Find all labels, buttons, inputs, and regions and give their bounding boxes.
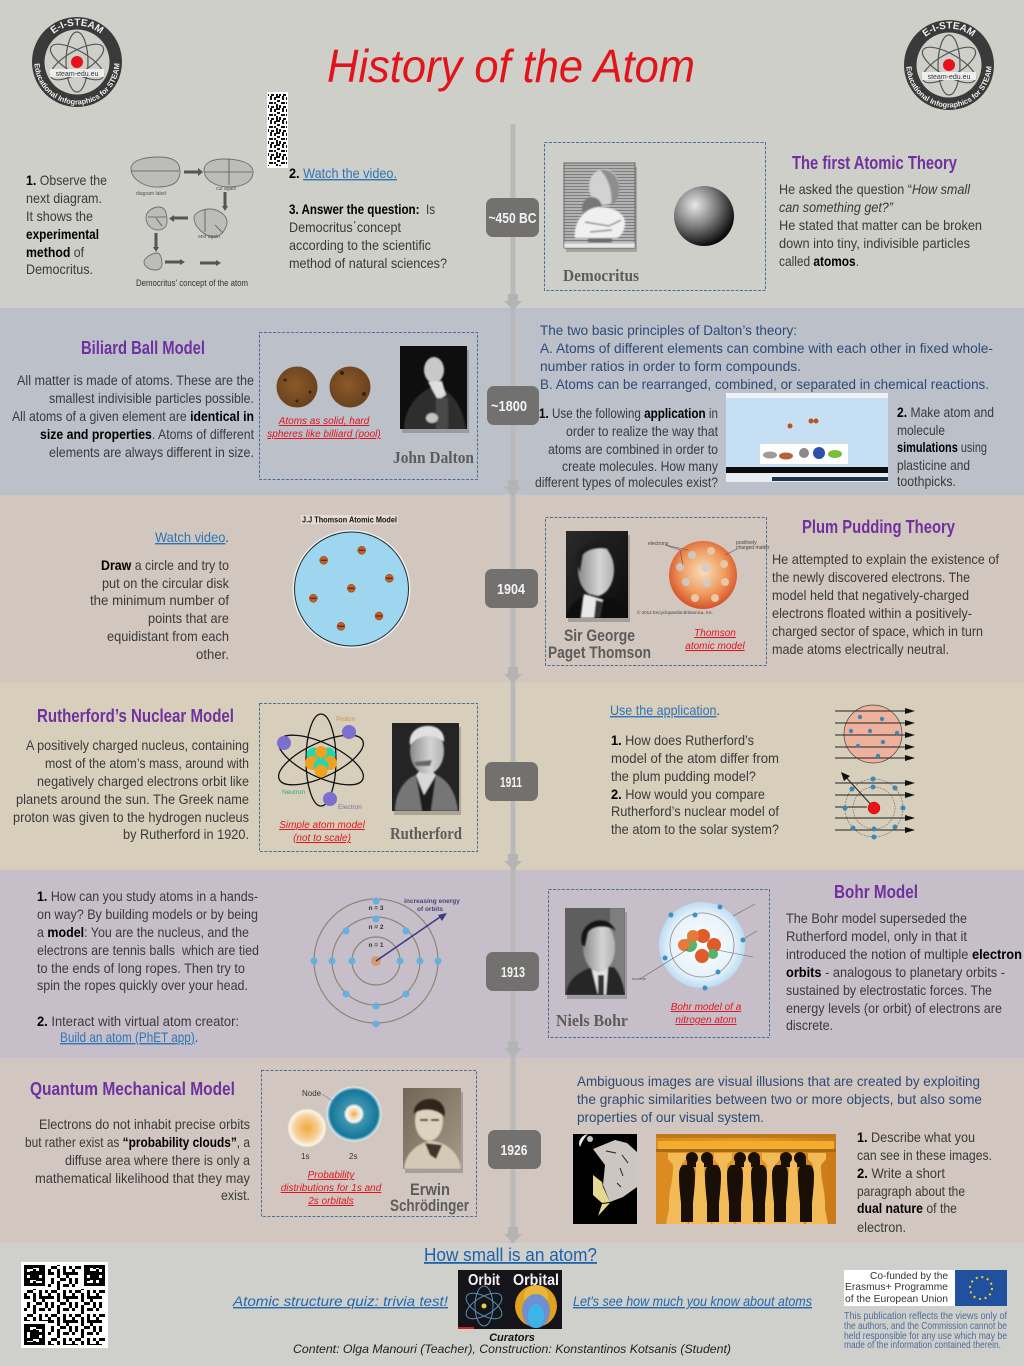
image: orbit vs orbital video thumbnail: Orbital [513,1272,559,1289]
text: Bohr model: energy levels (or orbit) of electrons are [786,1000,1002,1016]
caption: probability distributions: distributions for 1s and [281,1183,382,1194]
text: draw a circle task: points that are [148,610,229,626]
text: use the application: order to realize the way that [566,423,718,439]
heading: Plum Pudding Theory: Plum Pudding Theory [802,517,955,537]
diagram: Democritus' concept of the atom: diagram label [136,191,166,197]
text: first atomic theory: down into tiny, indivisible particles [779,235,970,251]
diagram: Democritus' concept of the atom [131,157,253,289]
diagram: simple atom model [272,714,370,811]
text: nuclear model: A positively charged nucleus, containing [26,737,249,753]
caption: Thomson atomic model: Thomson [694,628,736,639]
heading: Biliard Ball Model: Biliard Ball Model [81,338,205,358]
diagram: electron shells: n = 2 [368,924,384,931]
text: Bohr model: sustained by electrostatic forces. The [786,982,992,998]
text: describe the images: 1. Describe what you [857,1129,975,1145]
credits: curators: Content: Olga Manouri (Teacher), Construction: Konstantinos Kotsanis (Student) [293,1342,731,1356]
caption: atoms as solid spheres: spheres like billiard (pool) [267,429,381,440]
text: draw a circle task: Watch video. [155,529,229,545]
heading: Quantum Mechanical Model: Quantum Mechanical Model [30,1079,235,1099]
text: ambiguous images: the graphic similarities between two or more objects, but also some [577,1091,982,1107]
name: Rutherford: Rutherford [390,824,462,843]
diagram: plum pudding atom: positively [736,540,757,546]
text: nuclear model: proton was given to the hydrogen nucleus [13,809,249,825]
text: use the application questions: 1. How does Rutherford’s [611,732,754,748]
text: watch the video and answer [289,165,447,271]
text: use the application questions: model of the atom differ from [611,750,779,766]
heading: The first Atomic Theory: The first Atomic Theory [792,153,957,173]
text: draw a circle task: Draw a circle and try to [101,557,229,573]
dashed box: Democritus portrait and sphere [544,142,766,290]
text: watch the video and answer: 3. Answer the question: Is [289,201,435,217]
logo: E-I-STEAM right: steam-edu.eu [928,74,971,81]
text: nuclear model: by Rutherford in 1920. [123,826,249,842]
text: make atom simulations: simulations using [897,439,987,455]
diagram: simple atom model: Neutron [282,789,306,796]
logo: E-I-STEAM right: Educational Infographics for STEAM [906,66,992,109]
portrait: Rutherford [392,723,461,815]
diagram: electron shells: increasing energy [404,898,460,905]
text: ambiguous images: Ambiguous images are visual illusions that are created by exploiting [577,1073,980,1089]
text: nuclear model: planets around the sun. The Greek name [16,791,249,807]
text: principles of Dalton's theory: A. Atoms of different elements can combine with each other in fixed whole- [540,340,993,356]
text: study atoms in a hands-on way: Build an atom (PhET app). [60,1029,198,1045]
caption: simple atom model [279,820,366,844]
text: use the application questions: the plum pudding model? [611,768,756,784]
QR code: footer [21,1262,108,1348]
name: Niels Bohr: Niels Bohr [556,1011,628,1030]
text: use the application questions [610,702,779,837]
badge: 1926 [488,1130,541,1169]
name: Democritus: Democritus [563,266,639,285]
text: study atoms in a hands-on way: 2. Interact with virtual atom creator: [37,1013,239,1029]
panel: Thomson 1904 [0,495,1024,683]
portrait: Sir George Paget Thomson [566,531,630,622]
text: principles of Dalton's theory: B. Atoms can be rearranged, combined, or separated in chemical reactions. [540,376,989,392]
badge: 1904: 1904 [497,581,526,598]
diagram: Bohr nitrogen atom [632,902,757,990]
diagram: alpha scattering plum pudding [835,705,915,763]
text: use the application questions: Rutherford’s nuclear model of [611,803,779,819]
logo: E-I-STEAM left [32,17,122,107]
name: John Dalton: John Dalton [393,448,474,467]
text: describe the images [857,1129,992,1235]
timeline: vertical line with arrows [504,124,522,1243]
caption: Bohr model of a nitrogen atom: nitrogen atom [675,1015,737,1026]
text: first atomic theory: He asked the question “How small [779,181,971,197]
logo: E-I-STEAM right: E-I-STEAM [922,22,976,37]
portrait: Niels Bohr [565,908,627,999]
text: watch the video and answer: Democritus΄concept [289,219,401,235]
caption: probability distributions: 2s orbitals [307,1196,354,1207]
text: quantum model: exist. [221,1187,250,1203]
text: disclaimer [844,1311,1007,1351]
diagram: 1s and 2s orbitals: 1s [301,1152,309,1161]
text: principles of Dalton's theory [540,322,993,392]
panel: Bohr 1913 [0,870,1024,1058]
badge: 1913: 1913 [501,964,525,981]
caption: Bohr model of a nitrogen atom: Bohr model of a [671,1002,742,1013]
text: plum pudding theory: made atoms electrically neutral. [772,641,949,657]
diagram: Democritus' concept of the atom: cut again [216,186,237,192]
diagram: 1s and 2s orbitals: Node [302,1089,322,1098]
text: make atom simulations: plasticine and [897,457,970,473]
credits: curators: Curators [489,1332,535,1344]
text: study atoms in a hands-on way [37,888,259,1045]
header [32,17,994,110]
text: draw a circle task: equidistant from each [107,628,229,644]
text: make atom simulations: toothpicks. [897,473,956,489]
text: principles of Dalton's theory: The two basic principles of Dalton’s theory: [540,322,797,338]
image: ambiguous columns and people [656,1134,836,1224]
logo: E-I-STEAM left: steam-edu.eu [56,71,99,78]
text: draw a circle task: put on the circular disk [102,575,230,591]
diagram: simple atom model: Electron [338,804,362,811]
portrait: Democritus bust [564,163,637,252]
text: observe the diagram: 1. Observe the [26,172,107,188]
name: Erwin Schrödinger: Schrödinger [390,1196,469,1215]
icon: solid sphere [674,186,734,246]
text: observe the diagram: method of [26,244,84,260]
logo: Erasmus+ co-funded [844,1270,1007,1306]
caption: Thomson atomic model: atomic model [685,641,746,652]
name: Sir George Paget Thomson: Sir George [564,626,635,645]
panel: Democritus 450 BC [26,92,982,291]
text: make atom simulations: molecule [897,422,945,438]
text: study atoms in a hands-on way: to the ends of long ropes. Then try to [37,960,245,976]
text: describe the images: dual nature of the [857,1200,957,1216]
caption: Thomson atomic model [685,628,746,652]
logo: Erasmus+ co-funded: Co-funded by the [870,1271,948,1282]
text: use the application questions: 2. How would you compare [611,786,765,802]
text: billiard ball model: size and properties. Atoms of different [40,426,254,442]
text: plum pudding theory: electrons floated within a positively- [772,605,972,621]
badge: ~450 BC [486,198,539,237]
heading: Rutherford's Nuclear Model: Rutherford’s Nuclear Model [37,706,234,726]
badge: ~1800: ~1800 [491,398,527,415]
text: Bohr model [786,910,1022,1033]
caption: simple atom model: Simple atom model [279,820,366,831]
panel: Rutherford 1911 [0,683,1024,870]
title: History of the Atom [327,40,695,92]
text: use the application [535,405,718,490]
text: billiard ball model: All matter is made of atoms. These are the [17,372,254,388]
badge: 1904 [485,569,538,608]
diagram: Bohr nitrogen atom: nucleus [632,976,646,981]
text: quantum model [25,1116,250,1203]
text: watch the video and answer: 2. Watch the video. [289,165,397,181]
text: Bohr model: The Bohr model superseded the [786,910,967,926]
badge: 1911 [485,762,538,801]
text: billiard ball model [12,372,254,460]
text: nuclear model: negatively charged electrons orbit like [37,773,249,789]
image: orbit vs orbital video thumbnail: Orbit [468,1272,501,1289]
text: plum pudding theory: He attempted to explain the existence of [772,551,999,567]
text: study atoms in a hands-on way: on way? By building models or by being [37,906,258,922]
link: atomic structure quiz: Atomic structure quiz: trivia test! [232,1293,448,1309]
image: ambiguous face silhouette [573,1134,637,1224]
text: plum pudding theory: charged sector of space, which in turn [772,623,983,639]
text: quantum model: but rather exist as “probability clouds”, a [25,1134,250,1150]
text: study atoms in a hands-on way: 1. How can you study atoms in a hands- [37,888,258,904]
text: use the application: different types of molecules exist? [535,474,718,490]
text: make atom simulations [897,404,994,489]
text: observe the diagram: experimental [26,226,99,242]
dashed box: Dalton portrait and billiard balls [260,332,478,480]
text: describe the images: paragraph about the [857,1183,965,1199]
diagram: plum pudding atom [637,540,770,615]
QR code: video [267,92,288,168]
badge: ~1800 [487,386,539,425]
text: watch the video and answer: method of natural sciences? [289,255,447,271]
text: describe the images: can see in these images. [857,1147,992,1163]
text: study atoms in a hands-on way: spin the ropes quickly over your head. [37,977,248,993]
badge: 1911: 1911 [500,774,522,791]
logo: E-I-STEAM left: E-I-STEAM [50,18,104,34]
logo: E-I-STEAM left: Educational Infographics for STEAM [34,63,120,106]
text: use the application questions: the atom to the solar system? [611,821,779,837]
logo: Erasmus+ co-funded: of the European Union [845,1294,948,1305]
text: plum pudding theory: model held that negatively-charged [772,587,969,603]
text: study atoms in a hands-on way: electrons are tennis balls which are tied [37,942,259,958]
text: Bohr model: introduced the notion of multiple electron [786,946,1022,962]
text: plum pudding theory [772,551,999,657]
text: billiard ball model: smallest indivisible particles possible. [49,390,254,406]
text: observe the diagram: next diagram. [26,190,102,206]
text: describe the images: electron. [857,1219,906,1235]
text: nuclear model: most of the atom’s mass, around with [45,755,249,771]
text: draw a circle task [90,529,230,662]
text: Bohr model: discrete. [786,1017,833,1033]
name: Erwin Schrödinger: Erwin [410,1180,450,1199]
text: ambiguous images [577,1073,982,1125]
heading: Bohr Model: Bohr Model [834,882,918,902]
text: billiard ball model: elements are always different in size. [49,444,254,460]
diagram: J.J Thomson atomic model: J.J Thomson Atomic Model [302,514,397,524]
dashed box: Bohr portrait and nitrogen atom [548,890,770,1038]
name: Sir George Paget Thomson [548,626,651,662]
panel: Quantum 1926 [0,1058,1024,1243]
text: nuclear model [13,737,249,842]
text: study atoms in a hands-on way: a model: You are the nucleus, and the [37,924,249,940]
text: Bohr model: orbits - analogous to planetary orbits - [786,964,1005,980]
diagram: electron shells: of orbits [417,906,443,913]
diagram: J.J Thomson atomic model [292,514,410,648]
text: observe the diagram: It shows the [26,208,93,224]
diagram: plum pudding atom: charged matter [736,545,770,551]
screenshot: molecule builder app [726,393,888,482]
diagram: electron shells: n = 1 [368,942,384,949]
text: first atomic theory [779,181,982,269]
diagram: plum pudding atom: electrons [648,541,669,547]
caption: Bohr model of a nitrogen atom [671,1002,742,1026]
footer [0,1243,1024,1366]
text: quantum model: diffuse area where there is only a [65,1152,250,1168]
badge: 1926: 1926 [500,1142,528,1159]
text: first atomic theory: can something get?” [779,199,894,215]
name: Sir George Paget Thomson: Paget Thomson [548,643,651,662]
text: use the application: 1. Use the following application in [539,405,718,421]
text: make atom simulations: 2. Make atom and [897,404,994,420]
dashed box: Rutherford portrait and atom [260,704,478,852]
portrait: John Dalton [400,346,469,433]
dashed box: Thomson portrait and plum pudding [546,518,770,666]
link: How small is an atom?: How small is an atom? [424,1245,597,1265]
diagram: electron shells: n = 3 [368,905,384,912]
text: observe the diagram: Democritus. [26,261,93,277]
diagram: simple atom model: Proton [336,716,356,723]
image: orbit vs orbital video thumbnail [458,1270,562,1329]
icon: billiard balls [276,366,370,408]
text: first atomic theory: He stated that matter can be broken [779,217,982,233]
text: quantum model: Electrons do not inhabit precise orbits [39,1116,250,1132]
text: observe the diagram [26,172,107,277]
link: how much you know about atoms: Let's see how much you know about atoms [573,1293,812,1309]
caption: atoms as solid spheres [267,416,381,440]
logo: Erasmus+ co-funded: Erasmus+ Programme [845,1282,948,1293]
text: quantum model: mathematical likelihood that they may [35,1170,250,1186]
caption: simple atom model: (not to scale) [293,833,351,844]
diagram: Democritus' concept of the atom: and again [198,234,220,240]
badge: 1913 [486,952,539,991]
badge: ~450 BC: ~450 BC [488,210,537,227]
text: disclaimer: This publication reflects the views only of [844,1311,1007,1322]
text: billiard ball model: All atoms of a given element are identical in [12,408,254,424]
diagram: Democritus' concept of the atom: Democritus' concept of the atom [136,278,248,289]
text: ambiguous images: properties of our visual system. [577,1109,764,1125]
text: draw a circle task: the minimum number of [90,592,229,608]
credits: curators [293,1332,731,1356]
caption: atoms as solid spheres: Atoms as solid, hard [278,416,370,427]
text: first atomic theory: called atomos. [779,253,859,269]
diagram: alpha scattering nuclear model [835,772,915,840]
logo: E-I-STEAM right [904,20,994,110]
text: watch the video and answer: according to the scientific [289,237,431,253]
text: describe the images: 2. Write a short [857,1165,945,1181]
text: use the application: create molecules. How many [562,458,718,474]
diagram: plum pudding atom: © 2012 Encyclopaedia Britannica, Inc. [637,609,713,615]
text: draw a circle task: other. [196,646,229,662]
dashed box: Schrödinger portrait and orbitals [262,1070,476,1216]
text: principles of Dalton's theory: number ratios in order to form compounds. [540,358,801,374]
text: plum pudding theory: the newly discovered electrons. The [772,569,970,585]
diagram: 1s and 2s orbitals [287,1086,382,1161]
diagram: 1s and 2s orbitals: 2s [349,1152,357,1161]
panel: Dalton 1800 [0,308,1024,495]
text: use the application questions: Use the application. [610,702,720,718]
name: Erwin Schrödinger [390,1180,469,1215]
text: use the application: atoms are combined in order to [548,441,718,457]
diagram: electron shells [310,898,460,1028]
text: Bohr model: Rutherford model, only in that it [786,928,967,944]
caption: probability distributions [281,1170,382,1207]
caption: probability distributions: Probability [308,1170,355,1181]
portrait: Erwin Schrödinger [403,1088,463,1173]
